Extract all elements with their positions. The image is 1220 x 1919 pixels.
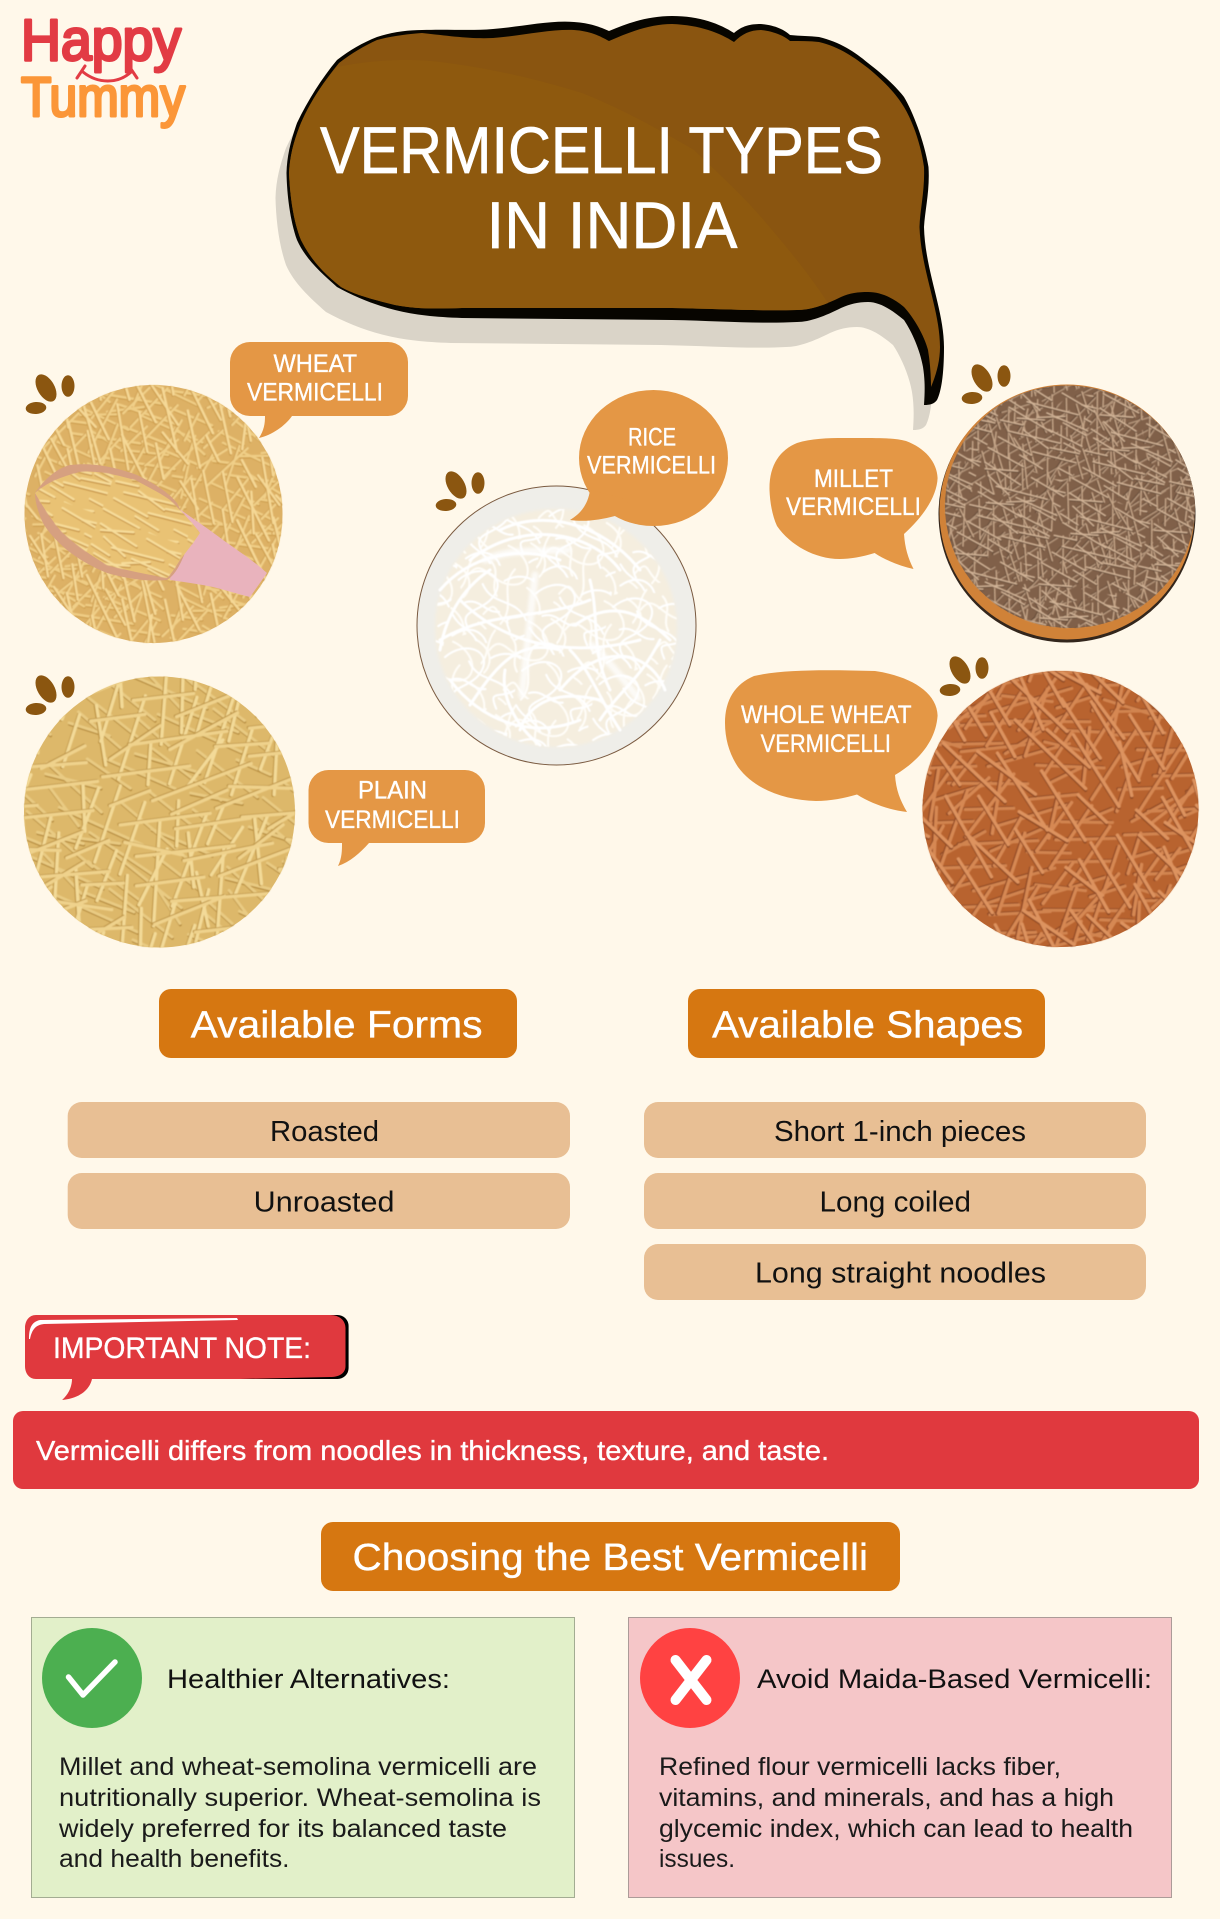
millet vermicelli photo (938, 384, 1196, 642)
spoon (35, 464, 267, 597)
icon: green check (42, 1628, 142, 1728)
seeds: wheat (25, 371, 74, 415)
wheat label bubble: VERMICELLI (247, 378, 383, 406)
rice label bubble (570, 390, 728, 526)
panel body text: Millet and wheat-semolina vermicelli are (59, 1753, 537, 1781)
panel heading: Healthier Alternatives: (167, 1664, 450, 1694)
heading: Choosing the Best Vermicelli (321, 1522, 900, 1591)
row: Unroasted (68, 1173, 570, 1229)
rice label bubble: VERMICELLI (587, 452, 716, 480)
title speech bubble (276, 16, 944, 430)
whole wheat label bubble: WHOLE WHEAT (741, 701, 912, 729)
seeds: whole wheat (939, 653, 988, 697)
forms list (68, 1102, 570, 1229)
important note callout: IMPORTANT NOTE: (53, 1332, 311, 1365)
row: Roasted: Roasted (270, 1116, 379, 1148)
heading: Available Forms: Available Forms (191, 1004, 483, 1046)
seeds: rice (435, 468, 484, 512)
heading: Choosing the Best Vermicelli: Choosing the Best Vermicelli (352, 1537, 868, 1579)
seeds: plain (25, 672, 74, 716)
panel body text: Refined flour vermicelli lacks fiber, (659, 1753, 1061, 1781)
rice vermicelli bowl photo (417, 486, 696, 765)
note bar: Vermicelli differs from noodles in thickness, texture, and taste. (36, 1435, 829, 1466)
panel body text: glycemic index, which can lead to health (659, 1815, 1133, 1843)
panel body text: vitamins, and minerals, and has a high (659, 1784, 1114, 1812)
row: Long coiled: Long coiled (820, 1186, 971, 1218)
shapes list (644, 1102, 1146, 1300)
title text: IN INDIA (486, 188, 738, 262)
note bar (13, 1411, 1199, 1489)
whole wheat label bubble: VERMICELLI (761, 730, 891, 758)
panel body text (659, 1753, 1133, 1873)
row: Long straight noodles (644, 1244, 1146, 1300)
whole wheat vermicelli photo (922, 671, 1198, 947)
row: Short 1-inch pieces: Short 1-inch pieces (774, 1116, 1026, 1148)
panel body text (58, 1753, 541, 1873)
title text: VERMICELLI TYPES (320, 113, 883, 187)
plain label bubble: VERMICELLI (325, 806, 460, 834)
panel body text: issues. (659, 1845, 735, 1873)
panel: avoid maida-based vermicelli (628, 1618, 1172, 1898)
millet label bubble (769, 438, 938, 569)
plain label bubble (308, 770, 485, 866)
row: Long straight noodles: Long straight noodles (755, 1258, 1046, 1290)
millet label bubble: VERMICELLI (786, 493, 921, 521)
millet label bubble: MILLET (814, 465, 893, 493)
panel: healthier alternatives (32, 1618, 574, 1898)
panel body text: widely preferred for its balanced taste (58, 1815, 507, 1843)
rice label bubble: RICE (628, 424, 676, 452)
panel body text: and health benefits. (59, 1845, 290, 1873)
row: Short 1-inch pieces (644, 1102, 1146, 1158)
row: Unroasted: Unroasted (254, 1186, 394, 1218)
row: Roasted (68, 1102, 570, 1158)
row: Long coiled (644, 1173, 1146, 1229)
heading: Available Shapes (688, 989, 1045, 1058)
logo: Happy Tummy: Tummy (21, 65, 185, 128)
heading: Available Shapes: Available Shapes (712, 1004, 1023, 1046)
logo: Happy Tummy: Happy (21, 8, 181, 73)
panel heading: Avoid Maida-Based Vermicelli: (757, 1664, 1152, 1694)
wheat vermicelli photo (24, 385, 282, 643)
icon: red cross (640, 1628, 740, 1728)
seeds: millet (961, 361, 1010, 405)
panel body text: nutritionally superior. Wheat-semolina is (59, 1784, 541, 1812)
wheat label bubble (230, 342, 408, 438)
plain vermicelli photo (24, 676, 295, 948)
plain label bubble: PLAIN (358, 776, 427, 804)
whole wheat label bubble (725, 670, 938, 812)
important note callout (25, 1315, 349, 1400)
title text (320, 113, 883, 262)
heading: Available Forms (159, 989, 517, 1058)
wheat label bubble: WHEAT (274, 350, 357, 378)
logo: Happy Tummy (21, 8, 185, 128)
